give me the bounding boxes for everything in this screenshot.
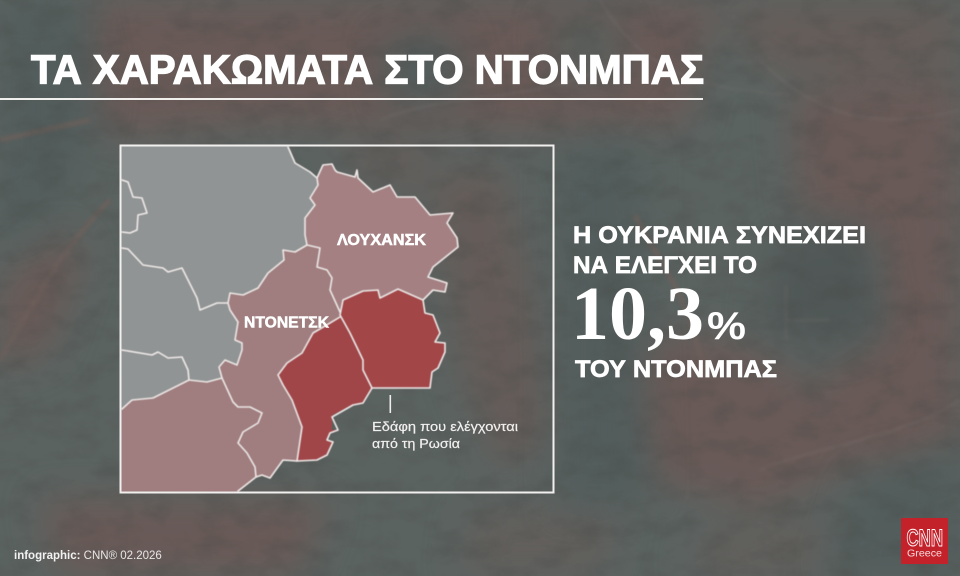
footer credit: infographic: CNN® 02.2026 (14, 550, 162, 562)
map region: occupied east (340, 289, 445, 388)
label: Donetsk: ΝΤΟΝΕΤΣΚ (244, 314, 330, 332)
icon: CNN Greece logo: Greece (907, 548, 942, 560)
map region: pink south-west (120, 378, 262, 492)
label: Luhansk: ΛΟΥΧΑΝΣΚ (337, 232, 427, 249)
icon: CNN Greece logo (901, 518, 948, 564)
icon: CNN Greece logo: CNN (906, 525, 943, 552)
map region: occupied west (278, 317, 372, 461)
map region: neutral grey north (120, 145, 318, 410)
frame border (120, 146, 554, 492)
map region: Luhansk (305, 164, 458, 315)
big number: 10,3 (571, 272, 704, 356)
title: ΤΑ ΧΑΡΑΚΩΜΑΤΑ ΣΤΟ ΝΤΟΝΜΠΑΣ (31, 46, 704, 92)
panel: map frame (120, 145, 554, 492)
road-like streaks (0, 120, 705, 380)
text block: key statistic: % (707, 305, 746, 348)
text block: key statistic: ΤΟΥ ΝΤΟΝΜΠΑΣ (575, 356, 777, 383)
callout: Russian-held territory: Εδάφη που ελέγχονται (372, 419, 518, 434)
callout: Russian-held territory (372, 395, 518, 451)
text block: key statistic: Η ΟΥΚΡΑΝΙΑ ΣΥΝΕΧΙΖΕΙ (573, 222, 866, 249)
callout: Russian-held territory: από τη Ρωσία (372, 436, 461, 451)
text block: key statistic (571, 222, 866, 383)
map region: Donetsk (219, 245, 340, 478)
map boundaries (122, 147, 458, 491)
text block: key statistic: ΝΑ ΕΛΕΓΧΕΙ ΤΟ (573, 252, 757, 279)
